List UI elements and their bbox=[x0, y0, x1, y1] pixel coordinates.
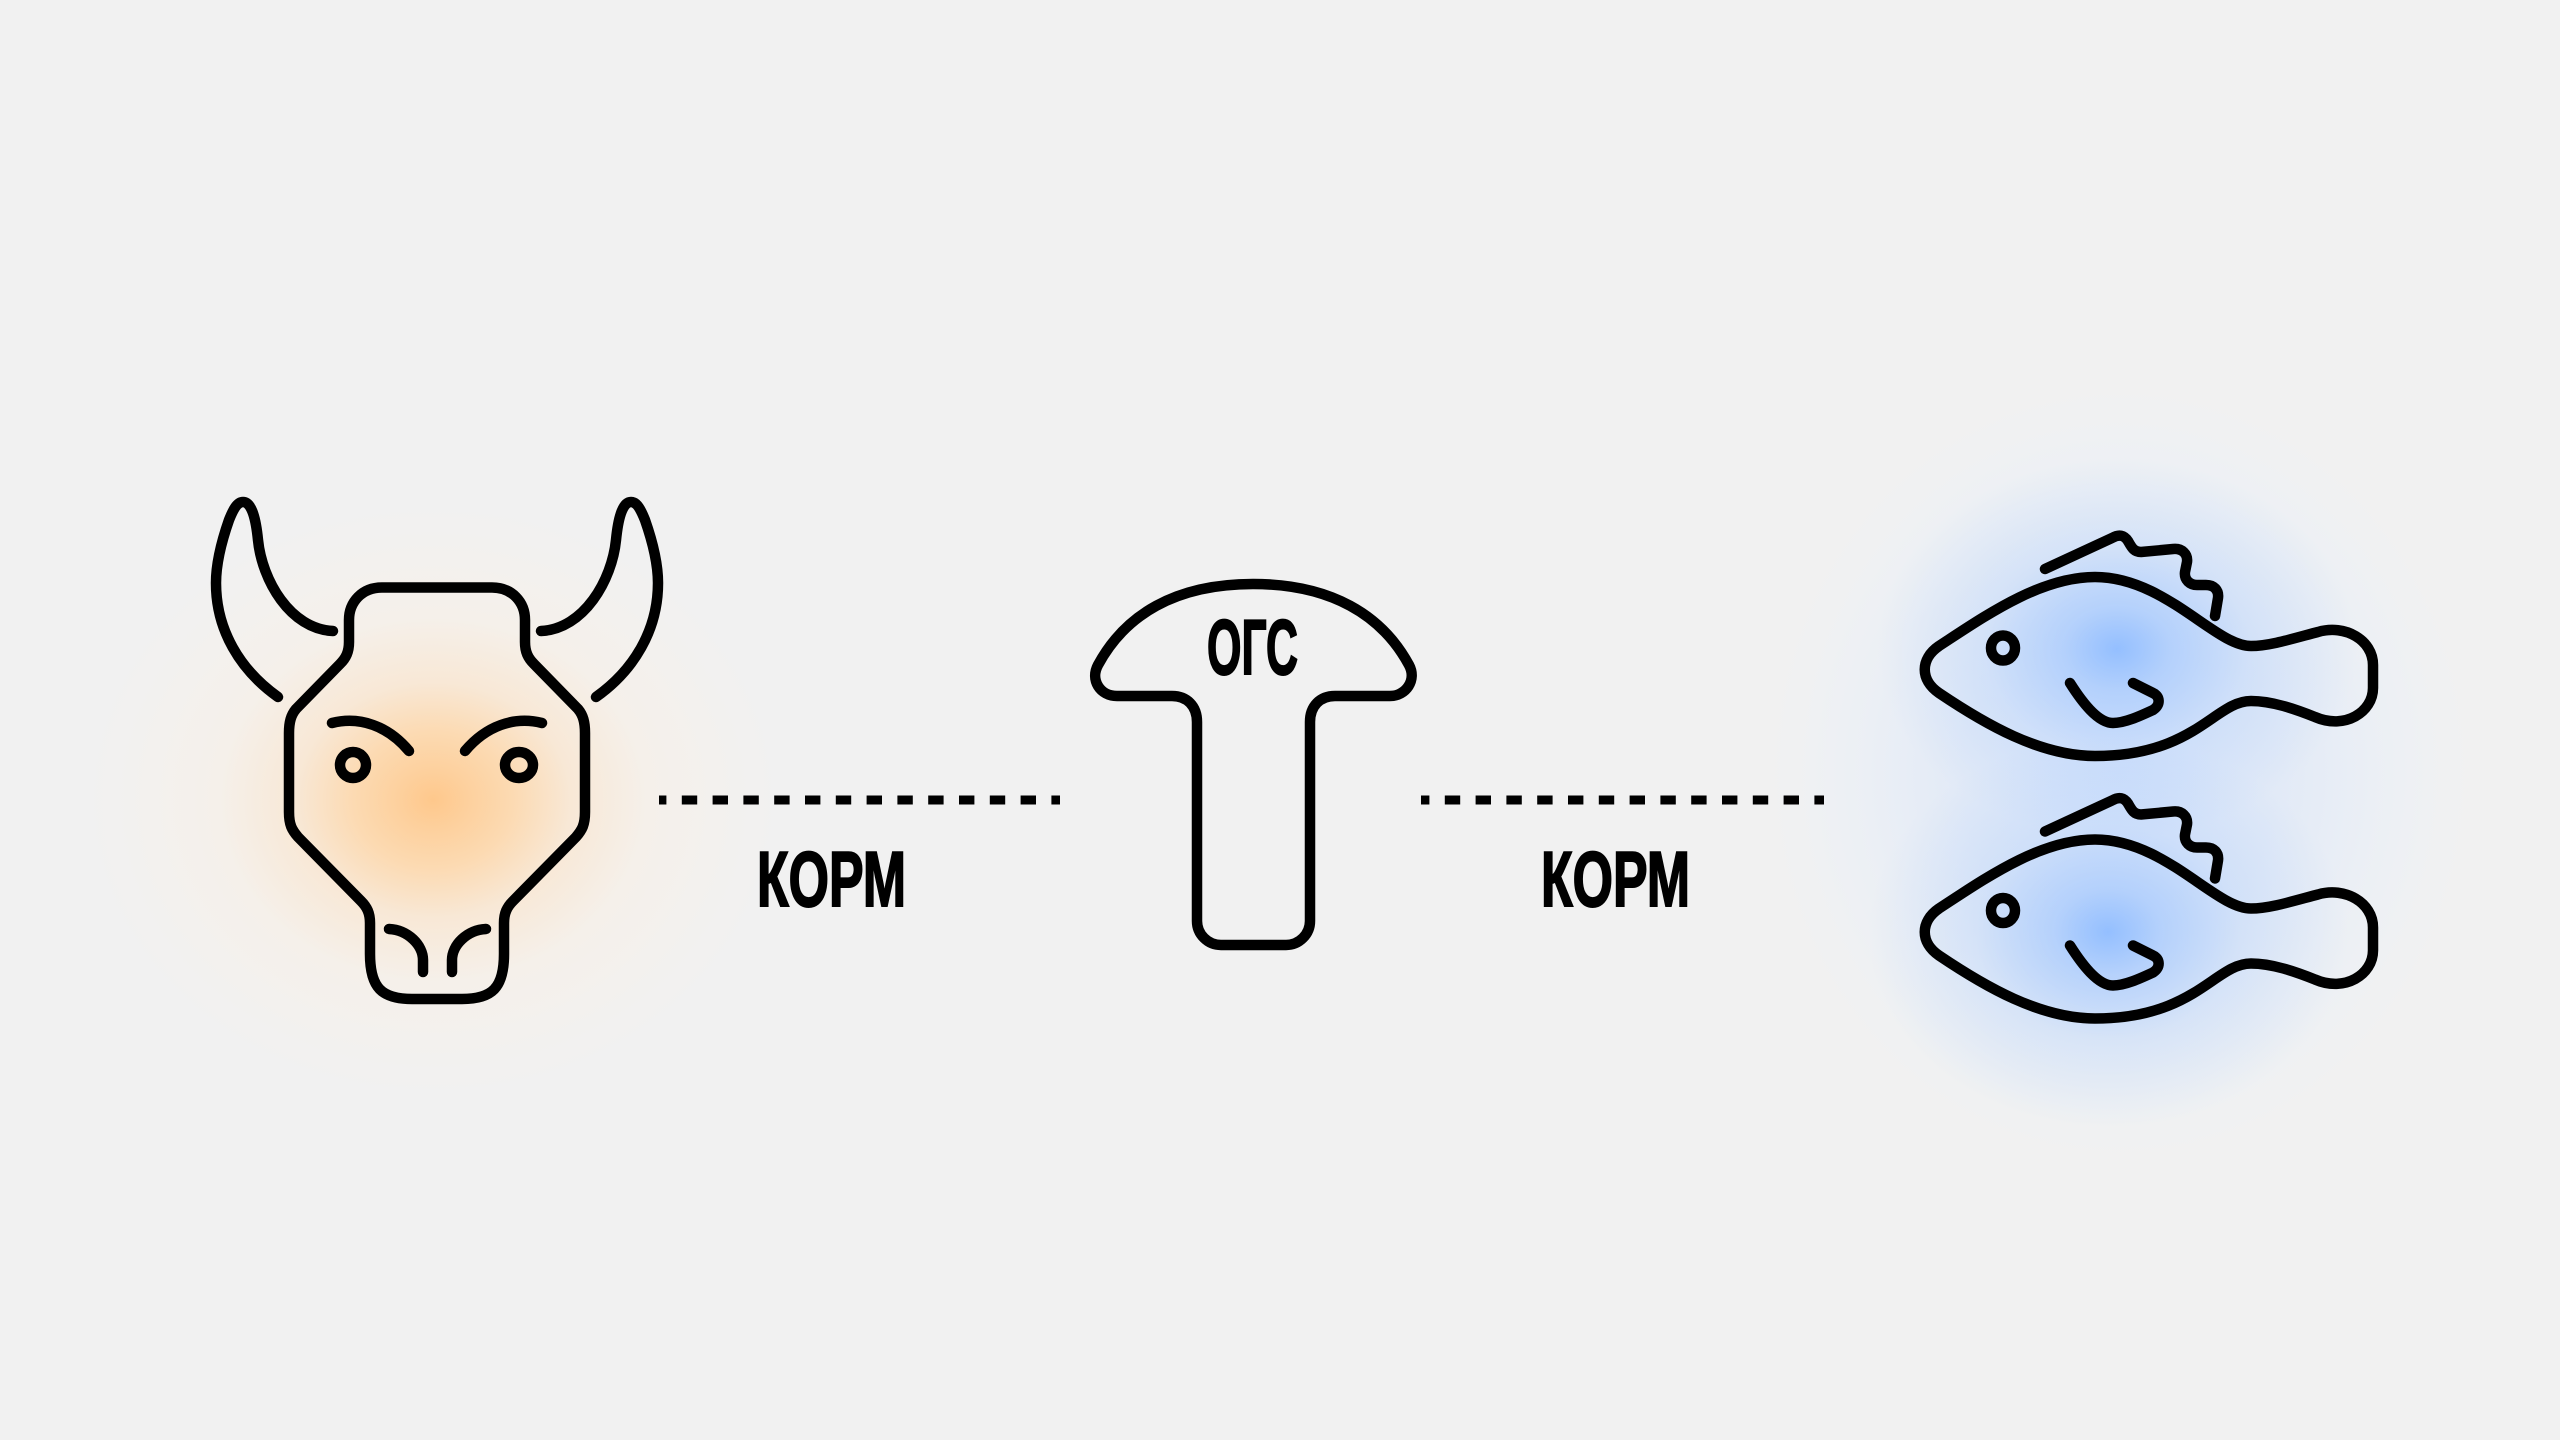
left nostril bbox=[389, 929, 423, 972]
left horn bbox=[216, 502, 333, 697]
side fin bbox=[2070, 946, 2159, 986]
dotted line: mushroom to fish bbox=[1421, 796, 1824, 804]
glow: blue behind lower fish bbox=[1868, 737, 2348, 1127]
side fin bbox=[2070, 683, 2159, 723]
left eye bbox=[340, 752, 366, 778]
eye bbox=[1991, 636, 2015, 660]
icon: mushroom ОГС bbox=[1095, 584, 1412, 945]
fish body bbox=[1925, 577, 2373, 756]
mushroom outline bbox=[1095, 584, 1412, 945]
fish body bbox=[1925, 840, 2373, 1018]
bull head bbox=[289, 588, 585, 999]
label: ОГС: ОГС bbox=[1207, 603, 1298, 691]
glow: wide blue behind fish bbox=[1770, 388, 2470, 1158]
icon: lower fish bbox=[1925, 798, 2373, 1018]
left eyebrow bbox=[332, 721, 409, 751]
label: корм left: КОРМ bbox=[757, 835, 906, 923]
label: корм right: КОРМ bbox=[1541, 835, 1690, 923]
right eye bbox=[505, 752, 533, 778]
eye bbox=[1991, 898, 2015, 923]
glow: blue behind upper fish bbox=[1877, 459, 2357, 839]
icon: upper fish bbox=[1925, 536, 2373, 756]
glow: orange behind bull bbox=[88, 505, 778, 1095]
dorsal fin bbox=[2045, 536, 2218, 616]
dotted line: bull to mushroom bbox=[659, 796, 1060, 804]
right eyebrow bbox=[465, 721, 542, 751]
dorsal fin bbox=[2045, 798, 2218, 878]
right nostril bbox=[452, 929, 486, 972]
icon: bull bbox=[216, 502, 658, 999]
right horn bbox=[541, 502, 658, 697]
